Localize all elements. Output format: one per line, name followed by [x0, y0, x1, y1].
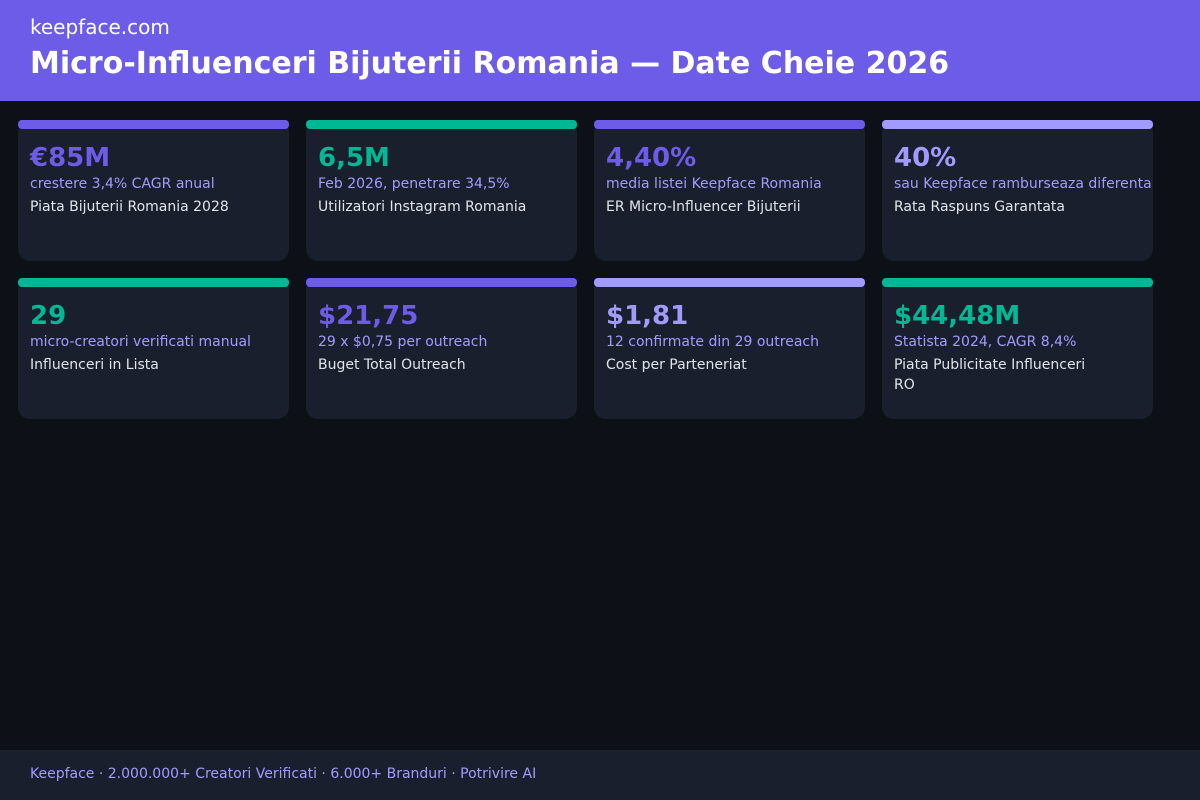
value: 40%: 40%	[894, 143, 956, 173]
label: influencers: Influenceri in Lista	[30, 357, 159, 373]
label: cost: Cost per Parteneriat	[606, 357, 747, 373]
panel: piata bijuterii	[18, 120, 289, 261]
panel: engagement rate	[594, 120, 865, 261]
value: 44,48M: $44,48M	[894, 301, 1020, 331]
value: 4,40%: 4,40%	[606, 143, 696, 173]
panel: piata publicitate	[882, 278, 1153, 419]
header banner	[0, 0, 1200, 101]
title: Micro-Influenceri Bijuterii Romania — Date Cheie 2026	[30, 46, 949, 81]
label: budget: Buget Total Outreach	[318, 357, 466, 373]
detail: refund: sau Keepface ramburseaza diferenta	[894, 176, 1152, 192]
label: ER: ER Micro-Influencer Bijuterii	[606, 199, 801, 215]
value: 21,75: $21,75	[318, 301, 418, 331]
detail: penetration: Feb 2026, penetrare 34,5%	[318, 176, 510, 192]
footer text: Keepface · 2.000.000+ Creatori Verificati · 6.000+ Branduri · Potrivire AI	[30, 766, 536, 782]
label: ad market second line: RO	[894, 377, 915, 393]
value: 6,5M: 6,5M	[318, 143, 390, 173]
detail: statista: Statista 2024, CAGR 8,4%	[894, 334, 1076, 350]
detail: confirmed: 12 confirmate din 29 outreach	[606, 334, 819, 350]
panel: rata raspuns	[882, 120, 1153, 261]
detail: list average: media listei Keepface Romania	[606, 176, 822, 192]
detail: verified: micro-creatori verificati manual	[30, 334, 251, 350]
label: market: Piata Bijuterii Romania 2028	[30, 199, 229, 215]
site name: keepface.com	[30, 15, 170, 39]
panel: influenceri in lista	[18, 278, 289, 419]
panel: cost per parteneriat	[594, 278, 865, 419]
footer	[0, 750, 1200, 800]
label: ad market: Piata Publicitate Influenceri	[894, 357, 1085, 373]
label: response rate: Rata Raspuns Garantata	[894, 199, 1065, 215]
detail: growth: crestere 3,4% CAGR anual	[30, 176, 215, 192]
value: 85M: €85M	[29, 143, 110, 173]
value: 1,81: $1,81	[606, 301, 688, 331]
value: 29: 29	[30, 301, 66, 331]
detail: per outreach: 29 x $0,75 per outreach	[318, 334, 487, 350]
panel: buget total	[306, 278, 577, 419]
panel: utilizatori instagram	[306, 120, 577, 261]
label: instagram users: Utilizatori Instagram Romania	[318, 199, 526, 215]
